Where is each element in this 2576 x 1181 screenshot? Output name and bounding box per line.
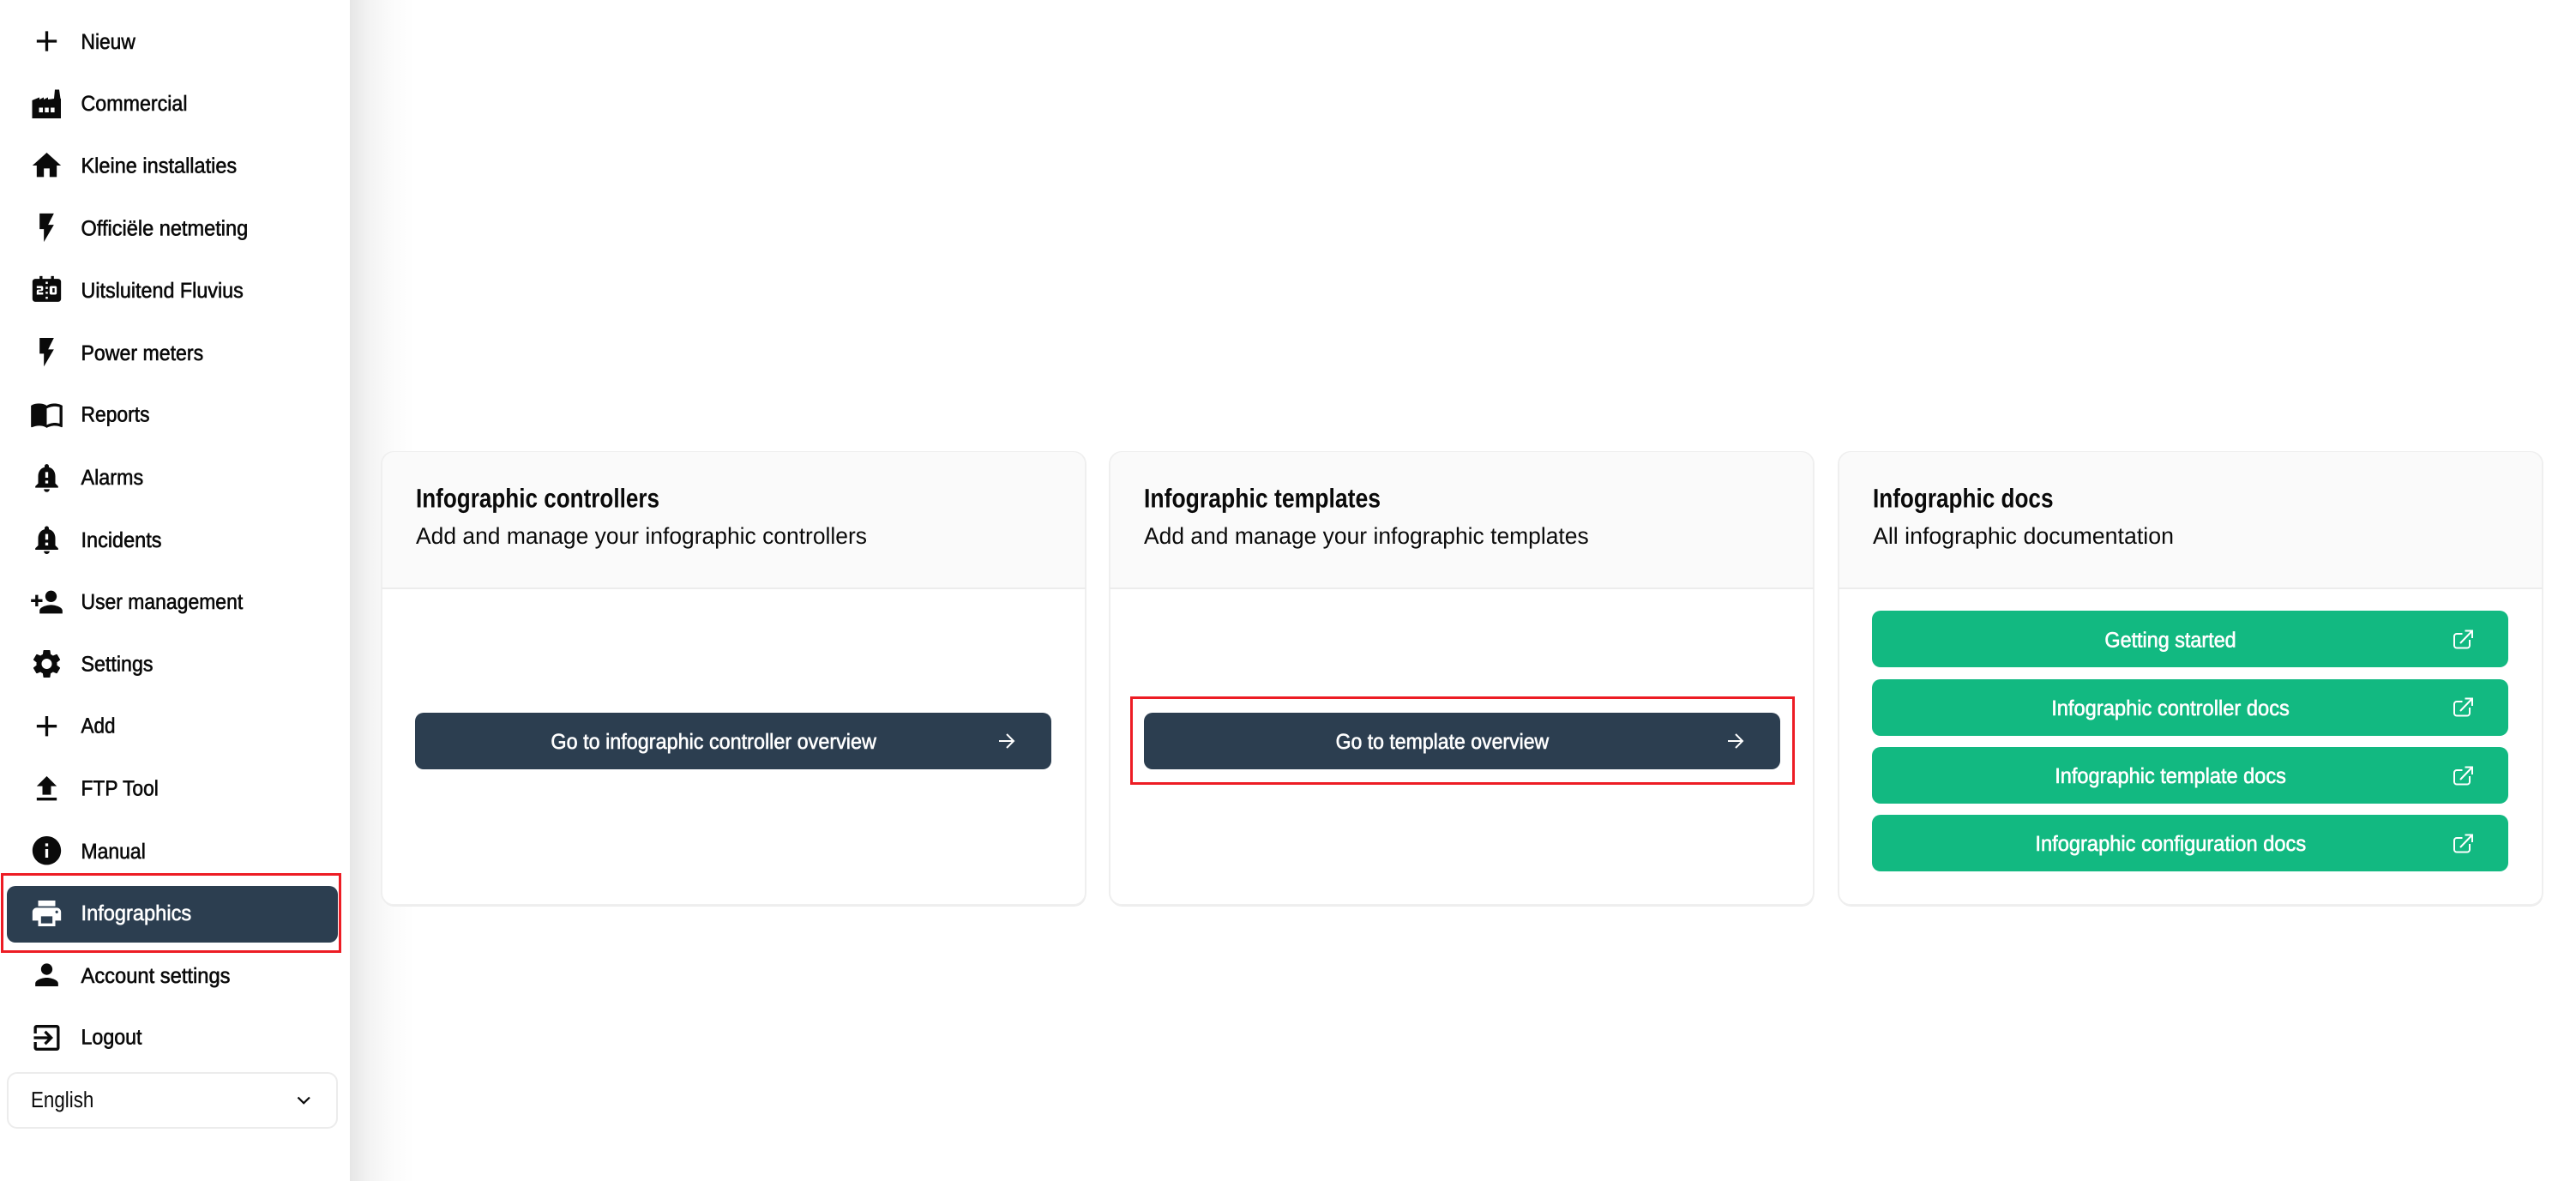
icon: external link (2454, 631, 2472, 648)
menu item: Incidents (35, 526, 161, 554)
button: Infographic configuration docs (1872, 815, 2508, 871)
button: Infographic controller docs: Infographic controller docs (2051, 696, 2290, 720)
icon: book (31, 404, 63, 428)
menu item: Uitsluitend Fluvius: Uitsluitend Fluvius (81, 279, 244, 303)
subtitle: Add and manage your infographic templates (1144, 523, 1589, 549)
icon: external link (2454, 698, 2472, 715)
menu item: Settings: Settings (81, 653, 153, 677)
menu item: FTP Tool (37, 776, 159, 801)
button: Infographic template docs: Infographic template docs (2055, 764, 2286, 788)
callout: red highlight around template button (1132, 698, 1794, 784)
menu item: Infographics (active) (7, 886, 338, 943)
icon: logout (34, 1025, 60, 1051)
panel: Infographic templates (1110, 452, 1815, 907)
icon: alert bell (35, 526, 58, 554)
icon: arrow right (1728, 734, 1742, 748)
menu item: Incidents: Incidents (81, 528, 161, 552)
icon: chevron down (298, 1098, 310, 1103)
icon: external link (2454, 835, 2472, 853)
icon: plus (37, 31, 57, 51)
button: Getting started (1872, 611, 2508, 667)
menu item: Infographics (active): Infographics (81, 901, 191, 925)
language selector: English (31, 1087, 93, 1112)
icon: scoreboard (33, 276, 61, 302)
icon: factory (33, 89, 61, 118)
menu item: Account settings: Account settings (81, 964, 230, 988)
icon: person (35, 963, 58, 986)
button: Infographic configuration docs: Infographic configuration docs (2035, 832, 2306, 856)
heading: Infographic templates (1144, 484, 1381, 513)
button: Go to infographic controller overview (415, 713, 1051, 769)
menu item: Officiële netmeting (39, 214, 248, 242)
menu item: Commercial (33, 89, 187, 118)
menu item: Power meters: Power meters (81, 341, 203, 365)
callout: red highlight around Infographics menu item (2, 875, 340, 952)
menu item: Power meters (39, 338, 203, 366)
icon: lightning bolt (39, 338, 54, 366)
menu item: Manual: Manual (81, 840, 146, 864)
menu item: Reports (31, 403, 149, 428)
menu item: User management: User management (81, 590, 243, 614)
button: Infographic controller docs (1872, 679, 2508, 736)
menu item: Logout: Logout (81, 1026, 142, 1050)
menu item: Kleine installaties (33, 153, 237, 178)
menu item: Add: Add (81, 714, 115, 738)
button: Go to infographic controller overview: Go to infographic controller overview (551, 730, 877, 754)
button: Go to template overview: Go to template overview (1336, 730, 1550, 754)
menu item: Nieuw: Nieuw (81, 30, 136, 54)
icon: info (33, 836, 61, 865)
menu item: Kleine installaties: Kleine installaties (81, 154, 237, 178)
panel: Infographic controllers (382, 452, 1086, 907)
menu item: FTP Tool: FTP Tool (81, 777, 159, 801)
panel: Infographic docs (1839, 452, 2543, 907)
language selector (8, 1073, 337, 1128)
icon: arrow right (999, 734, 1014, 748)
menu item: Settings (33, 650, 153, 678)
panel: sidebar navigation (0, 0, 350, 1181)
icon: lightning bolt (39, 214, 54, 242)
menu item: Officiële netmeting: Officiële netmeting (81, 217, 248, 241)
icon: gear (33, 650, 60, 678)
icon: plus (37, 716, 57, 736)
menu item: Reports: Reports (81, 403, 149, 427)
subtitle: Add and manage your infographic controllers (416, 523, 867, 549)
menu item: Commercial: Commercial (81, 92, 187, 116)
icon: printer (33, 901, 61, 926)
icon: add user (31, 591, 63, 613)
icon: external link (2454, 767, 2472, 784)
button: Go to template overview (1144, 713, 1780, 769)
menu item: Manual (33, 836, 146, 865)
icon: alert bell (35, 464, 58, 492)
menu item: Add (37, 714, 116, 738)
button: Infographic template docs (1872, 747, 2508, 804)
icon: home (33, 153, 61, 177)
menu item: Alarms (35, 464, 143, 492)
heading: Infographic docs (1873, 484, 2053, 513)
subtitle: All infographic documentation (1873, 523, 2174, 549)
heading: Infographic controllers (416, 484, 659, 513)
menu item: Logout (34, 1025, 142, 1051)
menu item: Nieuw (37, 30, 136, 54)
menu item: Uitsluitend Fluvius (33, 276, 244, 303)
button: Getting started: Getting started (2104, 629, 2236, 653)
menu item: Alarms: Alarms (81, 466, 143, 490)
icon: upload (37, 776, 57, 800)
